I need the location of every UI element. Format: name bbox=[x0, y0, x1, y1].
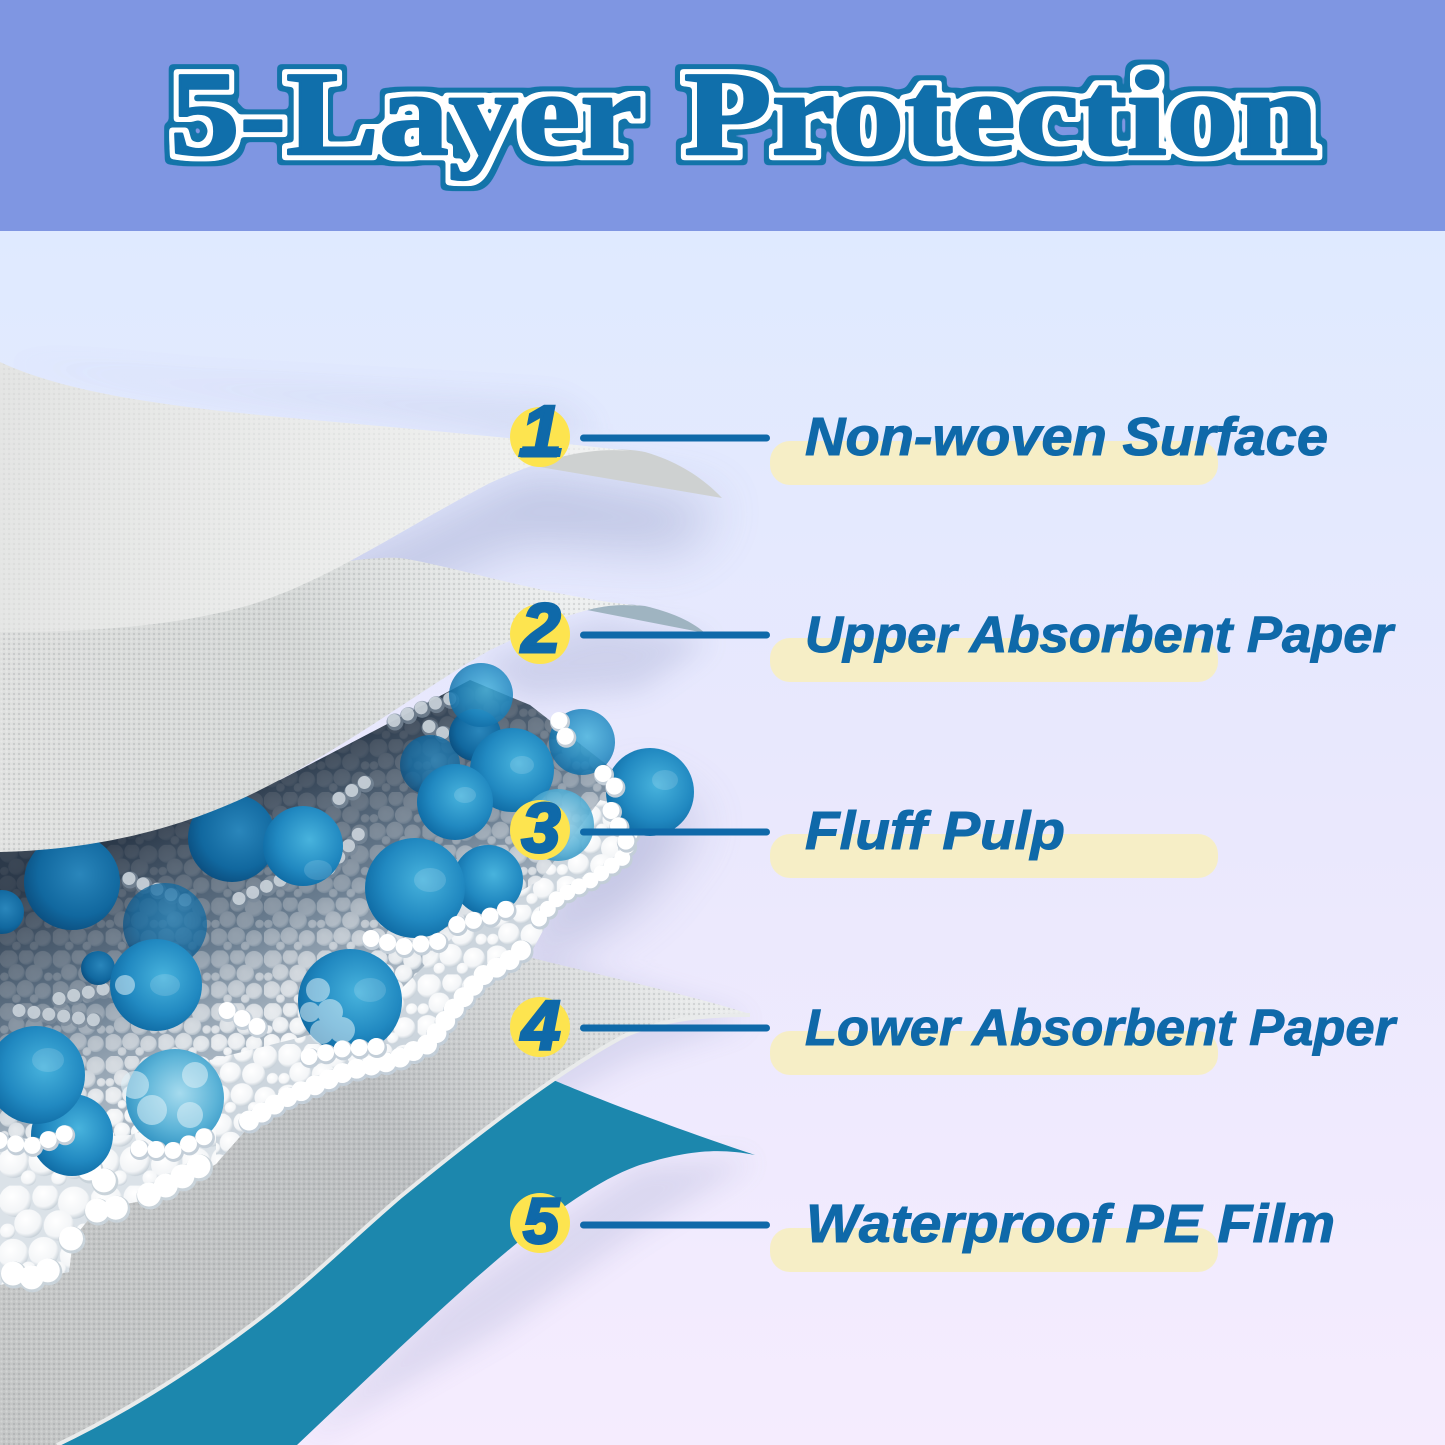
leader line bbox=[580, 1222, 770, 1228]
pulp depth shading bbox=[0, 680, 634, 1285]
highlight pill bbox=[770, 638, 1218, 682]
callout 3: Fluff Pulp bbox=[510, 789, 1218, 878]
number badge bbox=[510, 1193, 570, 1253]
callout 5: Waterproof PE Film bbox=[510, 1185, 1335, 1272]
title bbox=[170, 47, 1318, 180]
title: Protection bbox=[684, 47, 1318, 180]
soft shadows cast by layers bbox=[0, 360, 755, 1445]
leader line bbox=[580, 1024, 770, 1032]
paper back side bbox=[587, 605, 705, 633]
title: 5-Layer bbox=[170, 47, 642, 180]
highlight pill bbox=[770, 1031, 1218, 1075]
sheet back side bbox=[528, 449, 722, 498]
foreground beads in front of spheres bbox=[0, 720, 628, 1152]
callout 3: Fluff Pulp: 3 bbox=[522, 789, 561, 867]
sheet front surface bbox=[0, 362, 640, 632]
number badge bbox=[510, 407, 570, 467]
header band bbox=[0, 0, 1445, 231]
callout 2: Upper Absorbent Paper bbox=[510, 589, 1396, 682]
layer 3: fluff pulp bbox=[0, 663, 694, 1285]
leader line bbox=[580, 434, 770, 442]
label: Upper Absorbent Paper bbox=[805, 606, 1396, 663]
blue polymer spheres bbox=[0, 663, 694, 1176]
pulp bead mass bbox=[0, 680, 634, 1285]
white foreground bead band bbox=[120, 800, 634, 1164]
callout 2: Upper Absorbent Paper: 2 bbox=[520, 589, 561, 667]
number badge bbox=[510, 604, 570, 664]
layer 2: upper absorbent paper bbox=[0, 558, 705, 852]
leader line bbox=[580, 828, 770, 836]
label: Non-woven Surface bbox=[805, 407, 1328, 467]
label: Lower Absorbent Paper bbox=[805, 999, 1398, 1056]
callout 5: Waterproof PE Film: 5 bbox=[523, 1185, 560, 1257]
highlight pill bbox=[770, 1228, 1218, 1272]
callout 4: Lower Absorbent Paper bbox=[510, 986, 1398, 1075]
number badge bbox=[510, 800, 570, 860]
layer 1: non-woven surface bbox=[0, 362, 722, 632]
number badge bbox=[510, 997, 570, 1057]
label: Fluff Pulp bbox=[805, 801, 1065, 861]
callout 1: Non-woven Surface: 1 bbox=[521, 392, 561, 472]
scalloped pulp edge bbox=[13, 698, 632, 1280]
paper front surface bbox=[0, 558, 640, 852]
label: Waterproof PE Film bbox=[806, 1194, 1335, 1254]
sphere highlights and beads seen through spheres bbox=[32, 756, 678, 1128]
highlight pill bbox=[770, 441, 1218, 485]
layer 5: waterproof PE film bbox=[57, 1079, 755, 1445]
layer 4: lower absorbent paper bbox=[0, 900, 750, 1445]
leader line bbox=[580, 632, 770, 638]
callout 1: Non-woven Surface bbox=[510, 392, 1328, 485]
large foreground bead clusters bbox=[0, 1110, 216, 1285]
callout 4: Lower Absorbent Paper: 4 bbox=[520, 986, 560, 1064]
highlight pill bbox=[770, 834, 1218, 878]
